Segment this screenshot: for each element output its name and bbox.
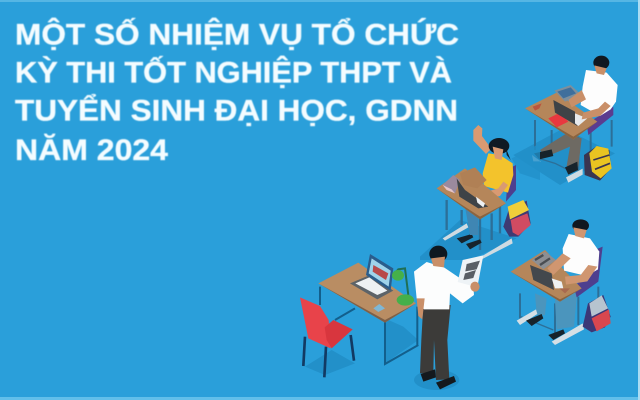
student raising hand at middle desk bbox=[420, 125, 540, 260]
title: TUYỂN SINH ĐẠI HỌC, GDNN bbox=[15, 94, 458, 128]
title: MỘT SỐ NHIỆM VỤ TỔ CHỨC bbox=[15, 18, 459, 52]
teacher's desk with laptop and red chair bbox=[300, 254, 418, 377]
title bbox=[15, 18, 459, 167]
title: KỲ THI TỐT NGHIỆP THPT VÀ bbox=[15, 56, 452, 90]
title: NĂM 2024 bbox=[15, 133, 169, 167]
student at front right desk bbox=[511, 219, 611, 345]
student at back right desk bbox=[513, 56, 618, 185]
teacher holding a paper bbox=[414, 246, 483, 390]
